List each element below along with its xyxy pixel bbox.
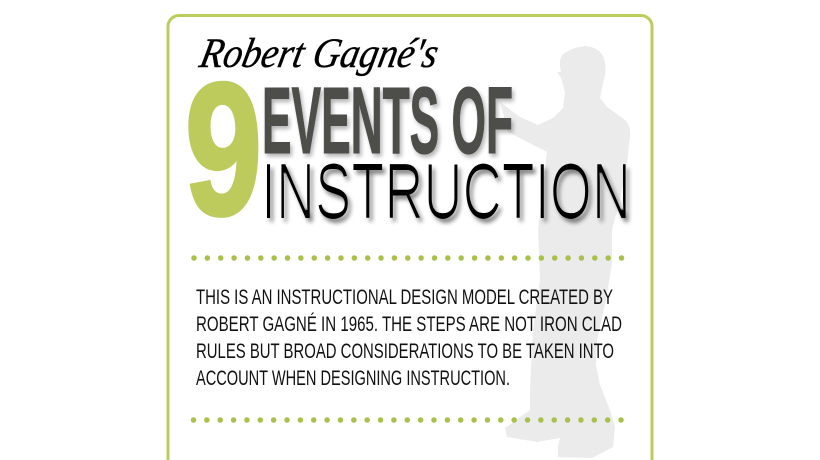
title: numeral 9: 9 [185,44,262,254]
text block: description: ROBERT GAGNÉ IN 1965. THE STEPS ARE NOT IRON CLAD [196,313,622,336]
title: Robert Gagné's: Robert Gagné's [195,30,443,77]
text block: description: ACCOUNT WHEN DESIGNING INSTRUCTION. [196,367,510,390]
text block: description [196,286,622,390]
panel: rounded card [168,16,652,460]
text block: description: THIS IS AN INSTRUCTIONAL DESIGN MODEL CREATED BY [196,286,613,309]
text block: description: RULES BUT BROAD CONSIDERATIONS TO BE TAKEN INTO [196,340,614,363]
infographic: EVENTS OF [262,68,513,174]
silhouette: presenter pointing [500,46,630,458]
title: INSTRUCTION: INSTRUCTION [261,147,631,235]
